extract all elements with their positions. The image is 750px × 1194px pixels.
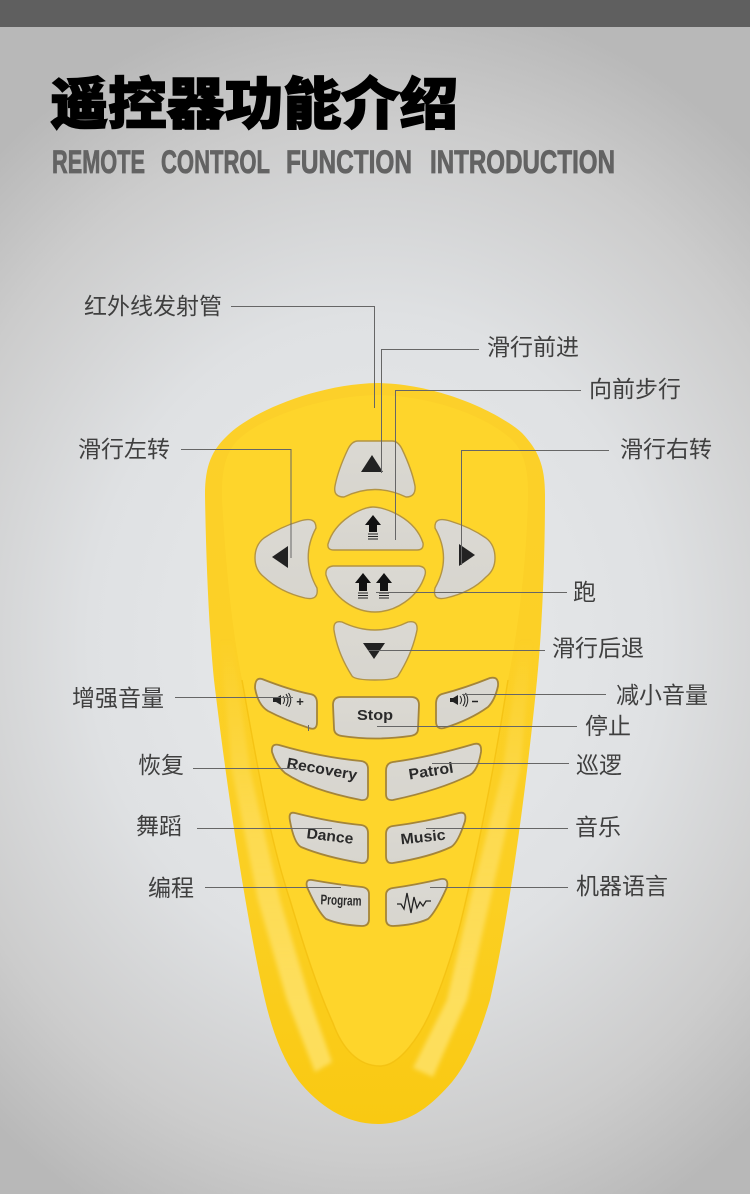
title: 遥控器功能介绍 bbox=[50, 73, 458, 136]
remote body bbox=[205, 383, 545, 1124]
button: slide left bbox=[255, 520, 317, 599]
label: recovery: 恢复 bbox=[138, 752, 184, 778]
subtitle: INTRODUCTION bbox=[430, 144, 615, 180]
button: stop: Stop bbox=[357, 707, 393, 724]
label: music: 音乐 bbox=[575, 814, 621, 840]
labels bbox=[72, 293, 712, 901]
button: music: Music bbox=[400, 827, 446, 848]
button: slide forward bbox=[335, 441, 415, 497]
label: patrol: 巡逻 bbox=[576, 752, 622, 778]
label: program: 编程 bbox=[148, 875, 194, 901]
label: slide left: 滑行左转 bbox=[78, 436, 170, 462]
label: volume down: 减小音量 bbox=[616, 682, 708, 708]
panel: remote control bbox=[205, 383, 545, 1124]
label: run: 跑 bbox=[573, 579, 596, 605]
label: slide backward: 滑行后退 bbox=[552, 635, 644, 661]
top band bbox=[0, 0, 750, 27]
subtitle: REMOTE bbox=[52, 144, 145, 180]
button: stop bbox=[333, 697, 419, 738]
right rim shine bbox=[413, 640, 532, 1077]
button: patrol bbox=[386, 744, 481, 800]
label: walk forward: 向前步行 bbox=[589, 376, 681, 402]
button: dance bbox=[290, 813, 368, 863]
button: recovery: Recovery bbox=[285, 755, 359, 784]
label: stop: 停止 bbox=[585, 713, 631, 739]
subtitle bbox=[52, 144, 615, 180]
button: slide backward bbox=[334, 622, 417, 680]
button: volume up bbox=[255, 679, 317, 729]
label: slide right: 滑行右转 bbox=[620, 436, 712, 462]
button: program: Program bbox=[320, 891, 362, 909]
label: slide forward: 滑行前进 bbox=[487, 334, 579, 360]
inner panel bbox=[222, 395, 528, 1066]
button: walk forward bbox=[328, 507, 423, 550]
button: program bbox=[307, 880, 369, 926]
button: slide right bbox=[434, 520, 495, 599]
subtitle: FUNCTION bbox=[286, 144, 412, 180]
button: patrol: Patrol bbox=[408, 760, 455, 783]
left rim shine bbox=[220, 640, 332, 1072]
label: volume up: 增强音量 bbox=[72, 685, 164, 711]
leader lines bbox=[175, 306, 609, 888]
button: recovery bbox=[272, 745, 368, 800]
button: machine language bbox=[386, 879, 447, 926]
subtitle: CONTROL bbox=[161, 144, 270, 180]
label: machine language: 机器语言 bbox=[576, 873, 668, 899]
button: music bbox=[386, 813, 465, 863]
button: run bbox=[326, 566, 425, 612]
inner panel edge bbox=[242, 680, 508, 1066]
button: volume up: + bbox=[296, 694, 304, 709]
label: IR emitter: 红外线发射管 bbox=[84, 293, 222, 319]
button: dance: Dance bbox=[306, 825, 354, 848]
button: volume down bbox=[436, 678, 498, 728]
label: dance: 舞蹈 bbox=[136, 813, 182, 839]
